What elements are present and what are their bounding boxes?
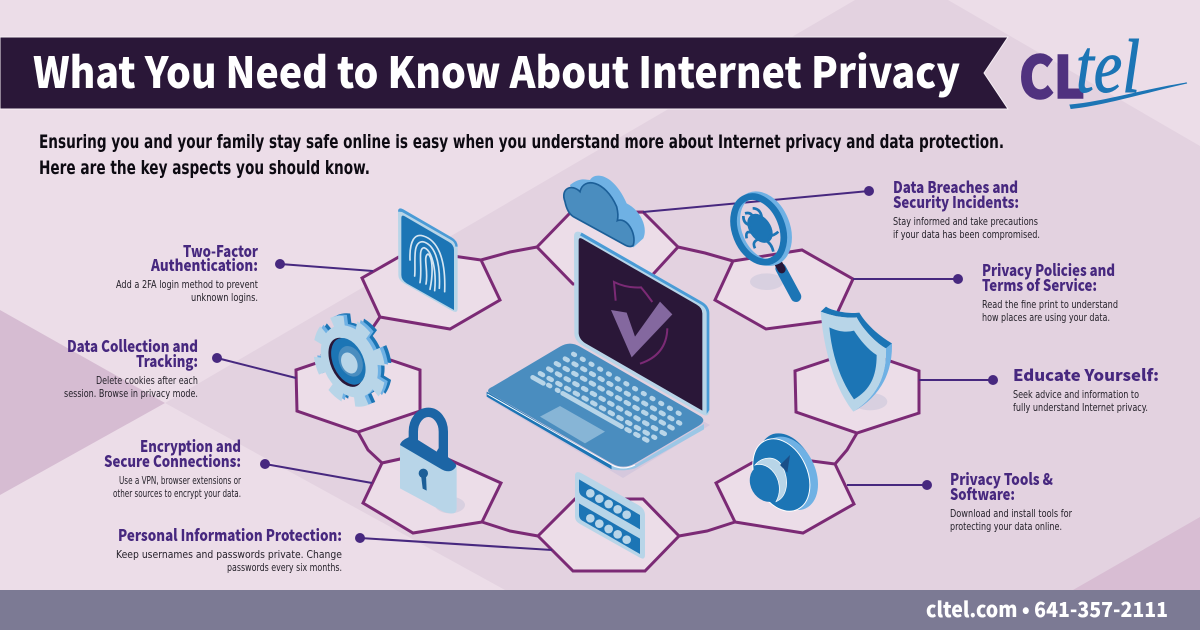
icon: laptop	[487, 232, 710, 478]
label: data collection and tracking: session. Browse in privacy mode.	[64, 387, 198, 400]
label: privacy tools and software: protecting your data online.	[950, 520, 1062, 533]
label: encryption and secure connections: Secure Connections:	[104, 448, 241, 472]
label: privacy policies and terms of service: Terms of Service:	[982, 272, 1097, 296]
logo: CLtel	[1019, 25, 1187, 115]
label: educate yourself	[1013, 362, 1159, 414]
label: privacy policies and terms of service: Privacy Policies and	[982, 257, 1115, 281]
hexagon network	[296, 212, 919, 571]
label: educate yourself: Seek advice and information to	[1013, 388, 1139, 401]
label: personal information protection: passwords every six months.	[227, 561, 342, 574]
icon: shield	[821, 307, 892, 412]
label: privacy tools and software: Privacy Tools &	[950, 466, 1054, 490]
label: data collection and tracking: Data Collection and	[67, 333, 198, 357]
label: privacy tools and software	[950, 466, 1072, 533]
label: encryption and secure connections: Use a VPN, browser extensions or	[119, 474, 241, 487]
label: privacy policies and terms of service	[982, 257, 1118, 324]
logo: CLtel: tel	[1076, 25, 1140, 109]
icon: gear	[305, 308, 400, 412]
footer bar	[0, 590, 1200, 630]
label: data breaches and security incidents: if your data has been compromised.	[893, 228, 1040, 241]
label: personal information protection	[116, 522, 342, 574]
title: What You Need to Know About Internet Privacy	[33, 39, 960, 101]
label: data collection and tracking	[64, 333, 198, 400]
label: encryption and secure connections: other sources to encrypt your data.	[113, 487, 241, 500]
laptop base	[487, 344, 704, 470]
label: privacy policies and terms of service: how places are using your data.	[982, 311, 1110, 324]
label: encryption and secure connections	[104, 433, 241, 500]
label: personal information protection: Personal Information Protection:	[118, 522, 342, 546]
leader lines and dots	[212, 186, 998, 550]
label: two-factor authentication: Two-Factor	[183, 238, 258, 262]
label: two-factor authentication	[116, 238, 258, 304]
label: data breaches and security incidents	[893, 174, 1040, 241]
icon: magnifying glass with bug	[724, 187, 798, 297]
laptop screen	[574, 232, 709, 415]
icon: fingerprint tile	[398, 208, 458, 312]
label: data collection and tracking: Tracking:	[136, 348, 198, 372]
label: encryption and secure connections: Encryption and	[140, 433, 241, 457]
label: personal information protection: Keep usernames and passwords private. Change	[116, 548, 342, 561]
label: educate yourself: Educate Yourself:	[1013, 362, 1159, 386]
label: two-factor authentication: Add a 2FA login method to prevent	[116, 278, 258, 291]
label: data breaches and security incidents: Data Breaches and	[893, 174, 1018, 198]
label: privacy tools and software: Software:	[950, 481, 1015, 505]
title banner	[0, 37, 1008, 109]
intro text: Here are the key aspects you should know.	[39, 157, 370, 179]
label: educate yourself: fully understand Internet privacy.	[1013, 401, 1148, 414]
label: two-factor authentication: Authentication:	[150, 252, 258, 276]
label: data breaches and security incidents: Stay informed and take precautions	[893, 215, 1038, 228]
icon: server	[575, 472, 645, 559]
icon: cloud	[564, 176, 645, 247]
label: two-factor authentication: unknown logins.	[191, 291, 258, 304]
label: privacy policies and terms of service: Read the fine print to understand	[982, 298, 1118, 311]
icon: dial	[742, 424, 829, 520]
icon: padlock	[400, 412, 465, 514]
bug	[743, 208, 778, 252]
intro text	[39, 131, 1004, 179]
label: data breaches and security incidents: Security Incidents:	[893, 189, 1019, 213]
label: privacy tools and software: Download and install tools for	[950, 507, 1072, 520]
logo: CLtel: CL	[1019, 31, 1085, 115]
label: data collection and tracking: Delete cookies after each	[96, 374, 198, 387]
contact details: cltel.com • 641-357-2111	[926, 594, 1168, 624]
